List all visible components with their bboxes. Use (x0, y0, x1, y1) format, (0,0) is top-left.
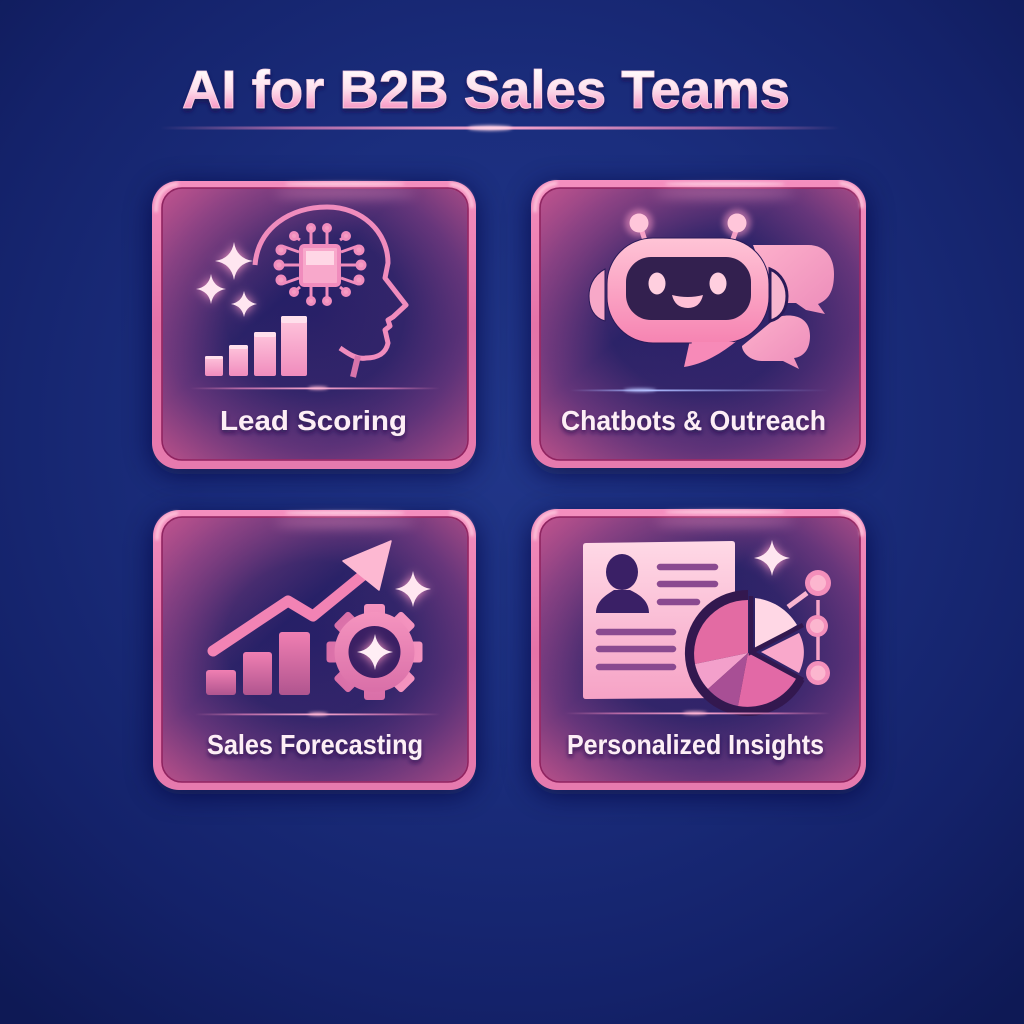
label: Sales Forecasting (207, 729, 423, 760)
icon: score bars (205, 316, 307, 376)
divider (565, 712, 830, 714)
icon: forecast bars (206, 632, 310, 695)
divider (195, 712, 440, 716)
icon: sparkle (754, 540, 790, 576)
icon: sparkles (196, 242, 257, 317)
title: AI for B2B Sales Teams (182, 60, 790, 120)
icon: speech bubbles (742, 245, 834, 369)
panel: sales forecasting (153, 510, 476, 794)
icon: head with chip (255, 207, 406, 377)
panel: lead scoring (152, 181, 476, 474)
label: Lead Scoring (220, 405, 407, 436)
label: Personalized Insights (567, 729, 824, 760)
title underline (160, 126, 840, 130)
icon: sparkle (395, 571, 431, 607)
icon: gear (326, 604, 422, 700)
card frame (531, 180, 866, 474)
card frame (531, 509, 866, 794)
label: Chatbots & Outreach (561, 405, 826, 436)
icon: profile document (583, 541, 735, 699)
icon: network nodes (788, 570, 831, 685)
icon: trend arrow (213, 541, 391, 651)
icon: robot (589, 209, 787, 367)
panel: chatbots and outreach (531, 180, 866, 474)
divider (190, 386, 440, 390)
panel: personalized insights (531, 509, 866, 794)
divider (570, 388, 830, 392)
icon: pie chart (685, 590, 804, 716)
card frame (153, 510, 476, 794)
card frame (152, 181, 476, 474)
